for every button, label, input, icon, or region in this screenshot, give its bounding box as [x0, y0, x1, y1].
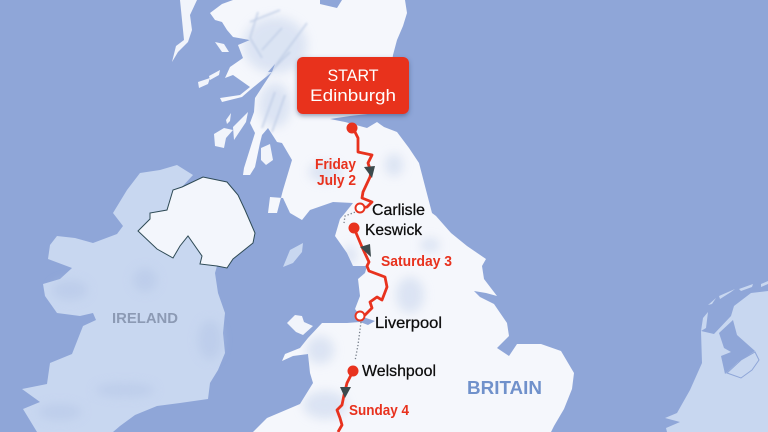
island chain: Wadden — [701, 281, 768, 331]
marker: Keswick — [348, 222, 360, 234]
label: Keswick: Keswick — [365, 222, 423, 239]
arrow: Sunday — [340, 387, 351, 398]
marker: Edinburgh — [346, 122, 358, 134]
direction arrows — [340, 166, 375, 398]
label: Liverpool: Liverpool — [375, 315, 442, 332]
label: Friday July 2 — [315, 156, 357, 189]
label: Carlisle: Carlisle — [372, 202, 425, 219]
islands — [172, 0, 313, 335]
label: Friday July 2: July 2 — [317, 172, 356, 189]
terrain shading: Ireland — [38, 268, 222, 420]
label: Friday July 2: Friday — [315, 156, 357, 173]
route line: Sunday — [337, 371, 353, 432]
arrow: Saturday — [360, 244, 371, 257]
land: Great Britain — [210, 0, 574, 432]
route line: Saturday — [354, 228, 387, 316]
label: Sunday 4: Sunday 4 — [349, 402, 410, 419]
marker: Liverpool — [356, 312, 364, 320]
route line: Friday — [353, 128, 372, 208]
island: Isle of Man — [283, 243, 303, 267]
callout: start — [297, 57, 409, 114]
island: Coll and Tiree — [198, 70, 220, 88]
marker: Carlisle — [356, 204, 364, 212]
terrain ridges: Highlands — [250, 10, 307, 132]
label: Ireland: IRELAND — [112, 310, 178, 327]
island: small isles — [215, 42, 229, 52]
arrow: Friday — [364, 166, 375, 178]
label: Saturday 3: Saturday 3 — [381, 253, 452, 270]
island: Colonsay — [226, 113, 231, 124]
land: Ireland — [22, 165, 225, 432]
island: Jura — [233, 112, 248, 140]
label: Britain: BRITAIN — [467, 378, 542, 398]
dotted ferry links — [344, 211, 361, 361]
callout: start: START — [328, 66, 378, 85]
water: IJsselmeer — [719, 320, 755, 374]
sea inlets on Britain — [268, 0, 375, 325]
terrain shading: Britain — [243, 10, 440, 419]
island: Arran — [261, 144, 273, 165]
land: Netherlands — [665, 281, 768, 432]
island: Anglesey — [287, 315, 313, 335]
marker: Welshpool — [348, 366, 358, 376]
island: Outer Hebrides — [172, 0, 197, 62]
callout: start: Edinburgh — [310, 86, 396, 105]
island: Islay — [214, 128, 233, 148]
land: Northern Ireland — [138, 177, 255, 268]
land: Flevoland — [727, 352, 759, 378]
label: Welshpool: Welshpool — [362, 363, 436, 380]
